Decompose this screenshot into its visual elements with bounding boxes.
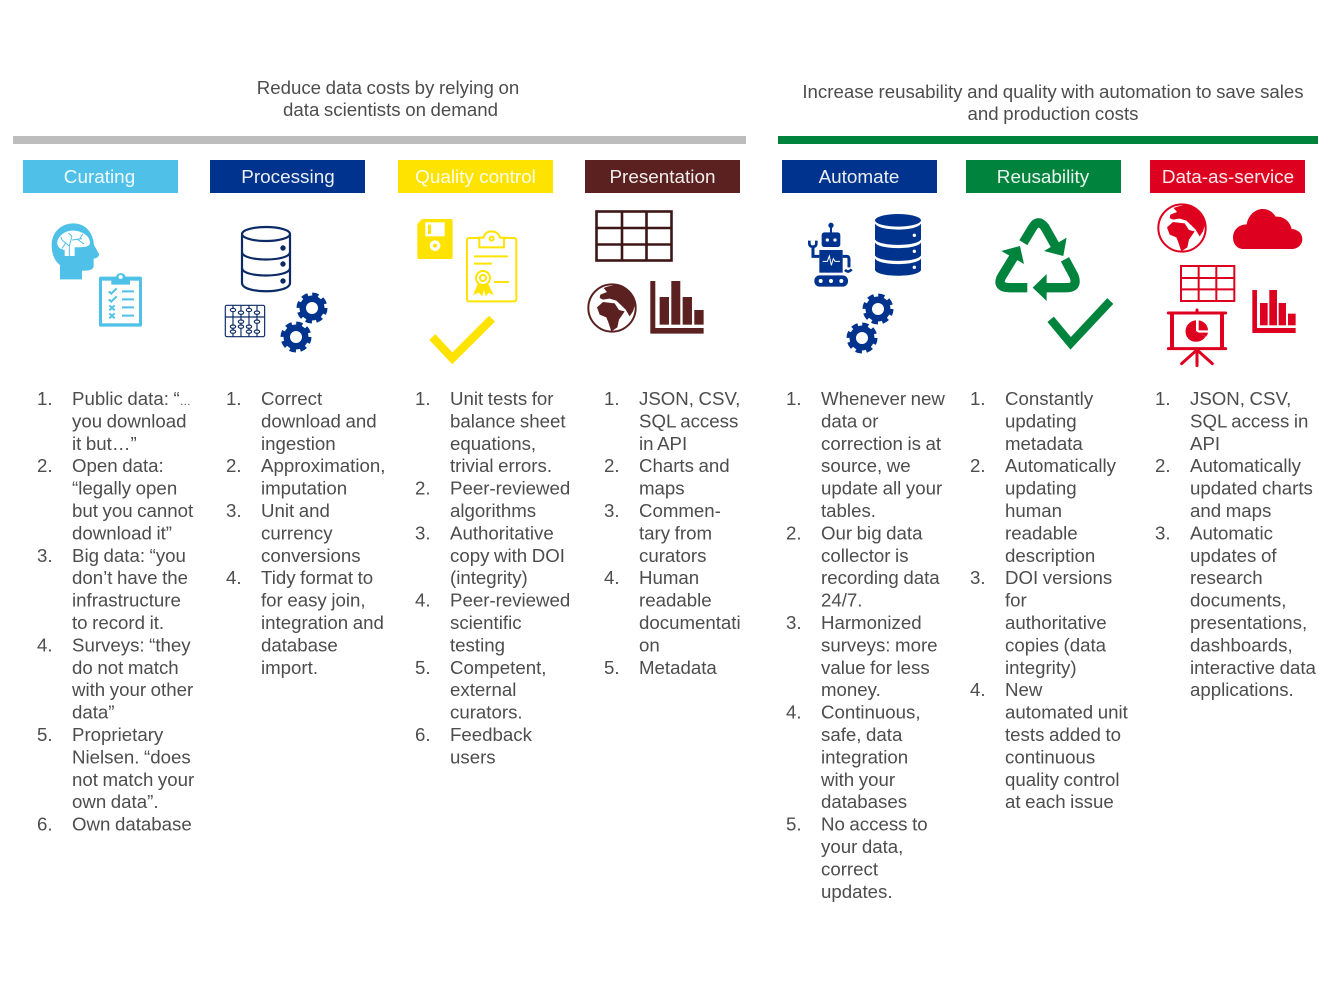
list: presentation: Metadata — [639, 657, 717, 678]
heading: increase reusability: Increase reusability and quality with automation to save sales — [802, 81, 1304, 102]
list: quality control: 2. — [415, 478, 431, 499]
icon: globe — [588, 284, 636, 332]
list: processing: 1. — [226, 388, 242, 409]
green section bar — [778, 136, 1318, 144]
list: automate: recording data — [821, 567, 940, 588]
list: data-as-service: 2. — [1155, 455, 1171, 476]
header: data-as-service: Data-as-service — [1162, 167, 1294, 188]
list: quality control: algorithms — [450, 500, 536, 521]
list: data-as-service: 3. — [1155, 522, 1171, 543]
list: curating: not match your — [72, 769, 194, 790]
header: processing: Processing — [241, 167, 335, 188]
list: presentation: tary from — [639, 522, 712, 543]
header: curating — [23, 160, 178, 193]
list: processing: for easy join, — [261, 590, 366, 611]
list: presentation: curators — [639, 545, 706, 566]
icon: globe — [1158, 204, 1206, 252]
list: quality control: users — [450, 746, 496, 767]
list: processing: imputation — [261, 478, 347, 499]
column: curating — [23, 160, 194, 835]
list: curating: own data”. — [72, 791, 159, 812]
list: presentation: Human — [639, 567, 699, 588]
header: reusability — [966, 160, 1121, 193]
list: quality control: 3. — [415, 522, 431, 543]
list: presentation: 1. — [604, 388, 620, 409]
list: automate: 2. — [786, 522, 802, 543]
list: quality control: 1. — [415, 388, 431, 409]
list: data-as-service: updates of — [1190, 545, 1277, 566]
header: data-as-service — [1150, 160, 1305, 193]
list: quality control: balance sheet — [450, 410, 566, 431]
list: automate: Harmonized — [821, 612, 922, 633]
icon: bar chart — [650, 281, 704, 334]
list: reusability: Automatically — [1005, 455, 1117, 476]
list: reusability: integrity) — [1005, 657, 1077, 678]
list: processing: 2. — [226, 455, 242, 476]
list: presentation: documentati — [639, 612, 741, 633]
column: processing — [210, 160, 385, 678]
icon: table grid — [1181, 266, 1234, 301]
list: automate: Whenever new — [821, 388, 945, 409]
icon: floppy disk — [417, 219, 453, 259]
list: curating: data” — [72, 702, 115, 723]
list: curating: do not match — [72, 657, 179, 678]
list: reusability: copies (data — [1005, 634, 1107, 655]
list: quality control: Peer-reviewed — [450, 590, 570, 611]
list: automate: update all your — [821, 478, 942, 499]
icon: presentation board — [1168, 310, 1226, 366]
list: quality control: Authoritative — [450, 522, 554, 543]
column: quality control — [398, 160, 570, 767]
list: processing: integration and — [261, 612, 384, 633]
list: presentation: 2. — [604, 455, 620, 476]
list: reusability: New — [1005, 679, 1043, 700]
header: quality control — [398, 160, 553, 193]
heading: reduce data costs: Reduce data costs by relying on — [257, 77, 519, 98]
list: reusability: 4. — [970, 679, 986, 700]
icon: table grid — [596, 212, 672, 260]
list: data-as-service: SQL access in — [1190, 410, 1308, 431]
list: automate: correct — [821, 858, 879, 879]
list: quality control: 4. — [415, 590, 431, 611]
column: data-as-service — [1150, 160, 1317, 700]
list: presentation: on — [639, 634, 660, 655]
header: presentation — [585, 160, 740, 193]
list: curating: Nielsen. “does — [72, 746, 191, 767]
list: reusability: Constantly — [1005, 388, 1094, 409]
list: automate: 3. — [786, 612, 802, 633]
list: curating: Public data: “… — [72, 388, 191, 409]
list: reusability: authoritative — [1005, 612, 1107, 633]
list: reusability: human — [1005, 500, 1062, 521]
list: curating: don’t have the — [72, 567, 188, 588]
list: automate: integration — [821, 746, 908, 767]
list: data-as-service: Automatically — [1190, 455, 1302, 476]
icon: head with brain — [52, 223, 99, 279]
list: presentation: 3. — [604, 500, 620, 521]
icon: check mark — [1051, 301, 1110, 343]
list: automate: money. — [821, 679, 881, 700]
list: automate: No access to — [821, 814, 928, 835]
icon: database outline — [242, 227, 290, 291]
list: data-as-service: documents, — [1190, 590, 1286, 611]
icon: abacus — [225, 305, 265, 337]
list: reusability: automated unit — [1005, 702, 1129, 723]
list: curating: Own database — [72, 814, 192, 835]
list: curating: Big data: “you — [72, 545, 186, 566]
list: processing: database — [261, 634, 338, 655]
list: curating: 4. — [37, 634, 53, 655]
icon: check mark — [432, 319, 492, 358]
icon: checklist clipboard — [99, 273, 142, 327]
header: quality control: Quality control — [415, 167, 536, 188]
list: automate: 24/7. — [821, 590, 862, 611]
list: curating: it but…” — [72, 433, 137, 454]
header: processing — [210, 160, 365, 193]
header: reusability: Reusability — [997, 167, 1090, 188]
list: reusability: quality control — [1005, 769, 1120, 790]
list: curating: download it” — [72, 522, 172, 543]
list: reusability: continuous — [1005, 746, 1095, 767]
heading: increase reusability: and production costs — [968, 103, 1138, 124]
list: curating: with your other — [71, 679, 193, 700]
list: curating: you download — [72, 410, 187, 431]
icon: cloud — [1233, 209, 1302, 249]
list: curating: 5. — [37, 724, 53, 745]
list: curating: 1. — [37, 388, 53, 409]
list: presentation: readable — [639, 590, 712, 611]
icon: gears — [848, 296, 892, 352]
list: presentation: JSON, CSV, — [639, 388, 740, 409]
list: presentation: SQL access — [639, 410, 738, 431]
list: curating: 2. — [37, 455, 53, 476]
icon: database solid — [875, 214, 921, 276]
icon: robot — [809, 223, 852, 287]
list: curating: Proprietary — [72, 724, 164, 745]
icon: gears — [282, 294, 326, 350]
header: automate: Automate — [819, 167, 899, 188]
list: reusability: tests added to — [1005, 724, 1121, 745]
list: automate: your data, — [821, 836, 903, 857]
list: quality control: Peer-reviewed — [450, 478, 570, 499]
list: curating: 3. — [37, 545, 53, 566]
list: quality control: (integrity) — [450, 567, 528, 588]
list: data-as-service: interactive data — [1190, 657, 1317, 678]
icon: certificate clipboard — [467, 231, 516, 301]
list: reusability: 3. — [970, 567, 986, 588]
icon: recycling arrows — [1000, 223, 1075, 301]
list: automate: Our big data — [821, 522, 923, 543]
list: automate: correction is at — [821, 433, 942, 454]
list: automate: collector is — [821, 545, 909, 566]
list: quality control: copy with DOI — [450, 545, 565, 566]
list: data-as-service: applications. — [1190, 679, 1294, 700]
list: presentation: maps — [639, 478, 685, 499]
list: data-as-service: dashboards, — [1190, 634, 1293, 655]
list: processing: import. — [261, 657, 318, 678]
list: automate: with your — [820, 769, 895, 790]
list: curating: infrastructure — [72, 590, 181, 611]
list: processing: Unit and — [261, 500, 330, 521]
list: presentation: in API — [639, 433, 687, 454]
list: data-as-service: and maps — [1190, 500, 1271, 521]
list: data-as-service: updated charts — [1190, 478, 1313, 499]
list: quality control: external — [450, 679, 516, 700]
list: automate: databases — [821, 791, 907, 812]
list: automate: surveys: more — [821, 634, 938, 655]
list: data-as-service: Automatic — [1190, 522, 1273, 543]
list: automate: 5. — [786, 814, 802, 835]
grey section bar — [13, 136, 746, 144]
list: quality control: curators. — [450, 702, 523, 723]
list: quality control: 5. — [415, 657, 431, 678]
list: curating: Surveys: “they — [72, 634, 191, 655]
list: data-as-service: API — [1190, 433, 1220, 454]
list: processing: Tidy format to — [261, 567, 373, 588]
list: reusability: updating — [1005, 410, 1077, 431]
list: quality control: 6. — [415, 724, 431, 745]
list: data-as-service: JSON, CSV, — [1190, 388, 1291, 409]
list: quality control: trivial errors. — [450, 455, 552, 476]
column: automate — [782, 160, 945, 902]
header: curating: Curating — [64, 167, 135, 188]
list: curating: but you cannot — [72, 500, 194, 521]
list: reusability: 1. — [970, 388, 986, 409]
list: processing: ingestion — [261, 433, 336, 454]
list: processing: Correct — [261, 388, 323, 409]
list: data-as-service: 1. — [1155, 388, 1171, 409]
list: automate: value for less — [821, 657, 930, 678]
list: processing: conversions — [261, 545, 361, 566]
list: presentation: Charts and — [639, 455, 730, 476]
list: automate: Continuous, — [821, 702, 921, 723]
list: reusability: for — [1005, 590, 1027, 611]
list: processing: 4. — [226, 567, 242, 588]
list: automate: source, we — [821, 455, 911, 476]
column: reusability — [966, 160, 1129, 812]
list: quality control: testing — [450, 634, 505, 655]
list: automate: data or — [821, 410, 878, 431]
list: presentation: 4. — [604, 567, 620, 588]
list: quality control: Feedback — [450, 724, 533, 745]
list: reusability: description — [1005, 545, 1095, 566]
list: automate: 1. — [786, 388, 802, 409]
list: automate: tables. — [821, 500, 876, 521]
list: quality control: scientific — [450, 612, 522, 633]
list: curating: “legally open — [72, 478, 177, 499]
heading: reduce data costs: data scientists on demand — [283, 99, 498, 120]
list: presentation: 5. — [604, 657, 620, 678]
header: presentation: Presentation — [609, 167, 716, 188]
list: processing: Approximation, — [261, 455, 385, 476]
list: automate: 4. — [786, 702, 802, 723]
list: quality control: equations, — [450, 433, 536, 454]
list: curating: 6. — [37, 814, 53, 835]
list: processing: download and — [261, 410, 377, 431]
list: presentation: Commen- — [639, 500, 721, 521]
list: curating: to record it. — [72, 612, 164, 633]
icon: bar chart — [1252, 290, 1296, 333]
list: curating: Open data: — [72, 455, 164, 476]
list: reusability: DOI versions — [1005, 567, 1112, 588]
list: processing: 3. — [226, 500, 242, 521]
list: reusability: updating — [1005, 478, 1077, 499]
header: automate — [782, 160, 937, 193]
list: quality control: Unit tests for — [450, 388, 554, 409]
list: processing: currency — [261, 522, 333, 543]
list: automate: updates. — [821, 881, 893, 902]
list: reusability: at each issue — [1005, 791, 1114, 812]
list: quality control: Competent, — [450, 657, 546, 678]
column: presentation — [585, 160, 741, 678]
list: reusability: metadata — [1005, 433, 1083, 454]
list: reusability: 2. — [970, 455, 986, 476]
list: automate: safe, data — [821, 724, 903, 745]
list: data-as-service: presentations, — [1190, 612, 1307, 633]
list: data-as-service: research — [1190, 567, 1263, 588]
list: reusability: readable — [1005, 522, 1078, 543]
